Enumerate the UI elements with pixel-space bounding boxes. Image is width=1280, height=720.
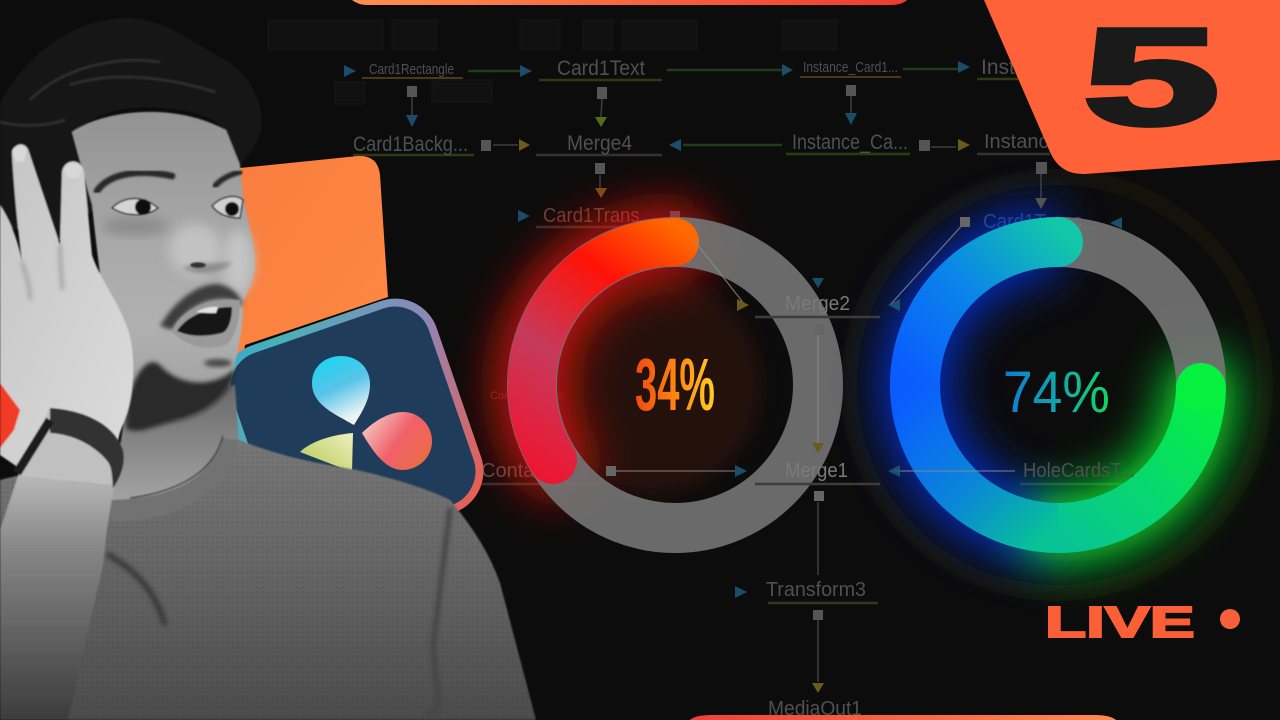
value 74%: 74% xyxy=(1003,360,1110,424)
node label: Contour: Contai xyxy=(481,460,539,482)
blue glow xyxy=(915,242,1058,528)
faint ring behind right donut xyxy=(849,177,1265,593)
eye socket shadow xyxy=(101,217,169,235)
number 5: 5 xyxy=(1083,1,1219,154)
yellow petal xyxy=(300,433,353,472)
node label: Transform3: Transform3 xyxy=(766,579,866,601)
watch strap xyxy=(17,420,50,473)
inner warm tint xyxy=(540,275,760,495)
left eye xyxy=(112,199,158,215)
wrist xyxy=(18,408,118,486)
node label: Instance_Ca: Instance_Ca... xyxy=(792,131,908,154)
right eye xyxy=(212,196,243,218)
node label: Card1Background: Card1Backg... xyxy=(353,133,468,156)
node label: Instance: Instanc xyxy=(984,131,1048,153)
node label: Card1Trans right: Card1Trans... xyxy=(983,211,1098,233)
top orange bar xyxy=(352,0,907,5)
blue petal xyxy=(312,356,370,425)
person xyxy=(0,18,536,720)
node label: Inst: Inst xyxy=(981,56,1015,79)
collar xyxy=(111,438,239,522)
node label: Card1Trans left: Card1Trans... xyxy=(543,205,655,227)
forearm xyxy=(0,476,114,720)
hair highlights xyxy=(0,60,215,125)
node label: Merge2: Merge2 xyxy=(785,293,850,315)
moustache xyxy=(160,284,243,330)
hair xyxy=(0,18,262,240)
live label xyxy=(1045,598,1240,647)
chest fold xyxy=(107,554,165,625)
node label: MediaOut1: MediaOut1 xyxy=(768,698,862,720)
fingernails xyxy=(12,145,82,178)
neck xyxy=(111,385,239,502)
node graph backdrop xyxy=(344,56,1140,720)
node label: Card1Rectangle: Card1Rectangle xyxy=(369,61,454,78)
LIVE text: LIVE xyxy=(1045,598,1195,647)
right cheek highlight xyxy=(223,230,253,294)
necklace xyxy=(130,436,223,498)
finger creases xyxy=(22,245,62,300)
node label: Merge1: Merge1 xyxy=(785,460,848,482)
logo tile xyxy=(216,292,490,566)
soul patch xyxy=(204,359,232,367)
icon: DaVinci Resolve logo xyxy=(216,292,490,566)
red glow xyxy=(532,242,675,460)
left eyebrow xyxy=(97,173,172,191)
node graph overlay on the rings xyxy=(606,217,1135,501)
knit texture xyxy=(0,440,536,720)
node label: Instance_Card1: Instance_Card1... xyxy=(803,59,898,76)
node label: Card1Text: Card1Text xyxy=(557,57,645,80)
face xyxy=(72,112,255,420)
progress arc xyxy=(915,242,1226,528)
node label: Contour rectangle: Contour_Recta... xyxy=(490,390,573,402)
gray ring track xyxy=(1058,242,1201,385)
red petal xyxy=(362,412,432,470)
red progress arc xyxy=(532,242,675,460)
sleeve seam xyxy=(428,508,450,720)
open mouth xyxy=(177,307,232,336)
gray ring track xyxy=(532,242,818,528)
beard xyxy=(126,362,236,431)
right eyebrow xyxy=(215,172,240,186)
watch band xyxy=(50,408,124,488)
green glow xyxy=(1058,388,1201,528)
mouth lips xyxy=(172,300,240,348)
hand xyxy=(0,144,133,470)
teeth xyxy=(196,307,218,313)
bottom orange bar xyxy=(690,715,1116,720)
red shape left edge xyxy=(0,383,20,448)
orange card xyxy=(200,156,388,432)
node label: HoleCards: HoleCardsT... xyxy=(1023,460,1135,482)
value 34%: 34% xyxy=(635,343,715,426)
node label: Merge4: Merge4 xyxy=(567,132,632,155)
donut chart: 34% xyxy=(532,242,818,528)
t-shirt xyxy=(0,440,536,720)
nostril xyxy=(182,262,232,273)
live dot xyxy=(1220,609,1240,629)
badge shape xyxy=(984,0,1280,174)
nose highlight xyxy=(169,224,221,276)
corner badge: number 5 xyxy=(984,0,1280,174)
donut chart: 74% xyxy=(915,242,1226,528)
faint node graph top row xyxy=(268,20,837,104)
